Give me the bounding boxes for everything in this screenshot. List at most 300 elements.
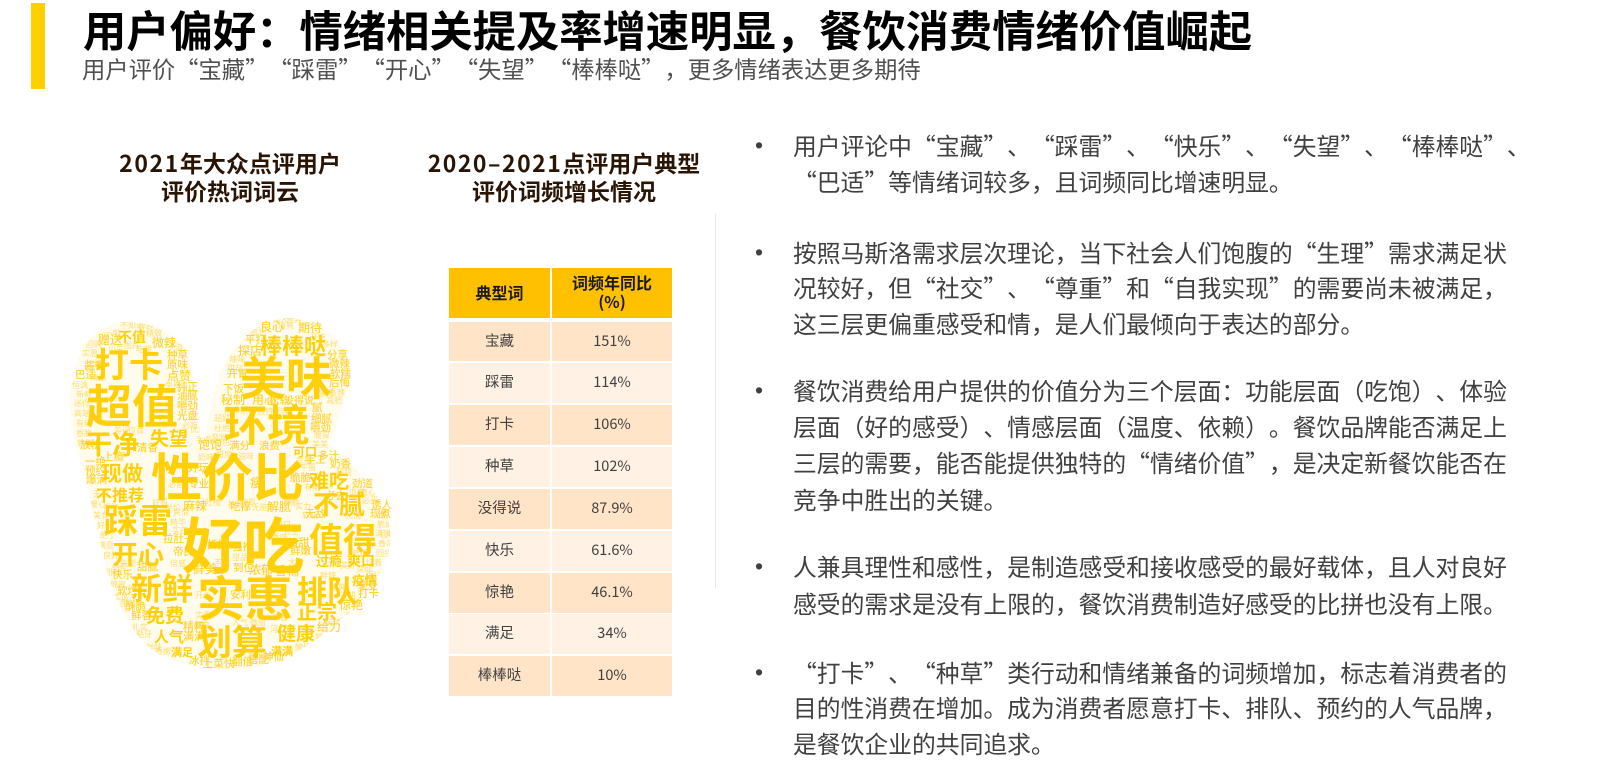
row 1 — [449, 322, 550, 361]
row 3: 打卡 — [485, 413, 514, 434]
word cloud: 原味 — [167, 357, 188, 372]
word cloud: 开心 — [112, 535, 164, 572]
word cloud: 倍感 — [170, 558, 186, 569]
word cloud: 精华 — [170, 517, 186, 528]
word cloud: 油腻 — [177, 388, 198, 403]
word cloud: 失望 — [120, 558, 136, 569]
word cloud: 神仙 — [263, 649, 284, 664]
word cloud: 惊喜 — [128, 425, 144, 436]
word cloud: 鲜味 — [146, 642, 162, 653]
row 1: 宝藏 — [485, 330, 514, 350]
text 2: 这三层更偏重感受和情，是人们最倾向于表达的部分。 — [793, 305, 1364, 340]
word cloud: 下饭 — [223, 381, 244, 396]
word cloud: 过瘾 — [316, 551, 342, 570]
word cloud: 必吃 — [182, 420, 198, 431]
heading: table: 2020–2021点评用户典型 — [428, 145, 700, 179]
word cloud: 开吃 — [310, 332, 326, 343]
word cloud: 不值 — [118, 327, 146, 347]
word cloud: 甜盐 — [227, 363, 243, 374]
accent bar — [31, 3, 45, 89]
bullet 1: • — [755, 132, 763, 158]
word cloud: 浓郁 — [249, 561, 273, 578]
row 5: 没得说 — [478, 497, 521, 518]
word cloud: 先生 — [283, 526, 299, 537]
word cloud: 软绵 — [212, 432, 228, 443]
word cloud: 暴躁 — [315, 632, 331, 643]
word cloud: 减肥 — [326, 395, 342, 406]
word cloud: 独特 — [257, 406, 273, 417]
word cloud: 鲜嫩 — [290, 543, 311, 558]
word cloud: 不腻 — [313, 485, 365, 522]
word cloud: 鲜辣 — [320, 570, 336, 581]
word cloud: 回头 — [376, 548, 392, 559]
row 6: 快乐 — [485, 539, 514, 560]
word cloud: 满满 — [271, 643, 293, 659]
word cloud: 用心 — [252, 391, 276, 408]
word cloud: 浓香 — [240, 406, 256, 417]
word cloud: 解腻 — [267, 498, 291, 515]
word cloud: 清爽 — [330, 582, 346, 593]
word cloud: 免费 — [146, 601, 184, 628]
text 5: “打卡”、“种草”类行动和情绪兼备的词频增加，标志着消费者的 — [793, 654, 1507, 689]
word cloud: 回切 — [380, 529, 396, 540]
row 7: 惊艳 — [485, 581, 514, 602]
word cloud: 折扣 — [207, 537, 228, 552]
word cloud: 软软 — [302, 510, 318, 521]
row 5 — [449, 489, 550, 529]
word cloud: 排队 — [297, 567, 357, 611]
word cloud: 微甜 — [250, 617, 266, 628]
word cloud: 好吃 — [138, 322, 154, 333]
word cloud: 必去 — [325, 488, 346, 503]
word cloud: 有期 — [304, 482, 320, 493]
word cloud: 上菜快 — [203, 656, 235, 671]
word cloud: 吃货 — [136, 344, 152, 355]
word cloud: 酱香 — [84, 358, 105, 373]
heading: word cloud — [119, 145, 341, 207]
word cloud: 预约 — [85, 463, 106, 478]
word cloud: 良好 — [103, 550, 119, 561]
word cloud: 炭烤 — [325, 617, 341, 628]
word cloud: 翻倍 — [232, 654, 253, 669]
word cloud: 甜美 — [120, 598, 136, 609]
text: 10% — [597, 664, 627, 685]
text 2: 按照马斯洛需求层次理论，当下社会人们饱腹的“生理”需求满足状 — [793, 234, 1507, 269]
word cloud: 有缘 — [76, 418, 92, 429]
word cloud: 软烂 — [117, 583, 138, 598]
word cloud: 拍照 — [228, 499, 244, 510]
text 2: 况较好，但“社交”、“尊重”和“自我实现”的需要尚未被满足， — [793, 269, 1507, 304]
word cloud: 必备 — [168, 479, 184, 490]
word cloud: 腻 — [312, 400, 323, 415]
word cloud: 牛蛋 — [300, 462, 316, 473]
word cloud: 回购 — [86, 339, 102, 350]
word cloud: 鲜香 — [131, 608, 152, 623]
word cloud: 好吃 — [182, 497, 304, 586]
heading: table: 评价词频增长情况 — [472, 173, 656, 207]
word cloud: 家常 — [250, 550, 266, 561]
word cloud: 冰拌 — [189, 653, 210, 668]
word cloud: 清甜 — [288, 535, 309, 550]
word cloud: 酥软 — [362, 472, 378, 483]
word cloud: 甜腻 — [137, 559, 158, 574]
word cloud: 赠送 — [98, 331, 122, 348]
subtitle: 用户评价“宝藏”“踩雷”“开心”“失望”“棒棒哒”，更多情绪表达更多期待 — [82, 51, 921, 85]
word cloud: 大赞 — [352, 598, 368, 609]
word cloud: 失望 — [150, 424, 188, 451]
word cloud: 点赞 — [167, 367, 191, 384]
word cloud: 实诚 — [113, 592, 129, 603]
word cloud: 纯正 — [177, 379, 198, 394]
text: 114% — [593, 371, 631, 392]
word cloud: 奶香 — [330, 456, 351, 471]
row 9 — [449, 656, 550, 696]
word cloud: 炭烤 — [345, 610, 361, 621]
table — [449, 268, 672, 318]
word cloud: 光盘 — [177, 408, 198, 423]
word cloud: 滋味 — [238, 451, 254, 462]
word cloud: 劲道 — [352, 476, 373, 491]
text 5: 目的性消费在增加。成为消费者愿意打卡、排队、预约的人气品牌， — [793, 689, 1507, 724]
word cloud: 麻辣 — [183, 497, 207, 514]
text: 61.6% — [591, 539, 633, 560]
word cloud: 甜度 — [216, 449, 232, 460]
text 4 — [793, 548, 1507, 620]
word cloud: 探店 — [238, 342, 262, 359]
word cloud: 给力 — [317, 618, 341, 635]
word cloud: 回味 — [273, 406, 289, 417]
word cloud: 上当 — [84, 358, 100, 369]
text: 151% — [593, 330, 631, 350]
word cloud: 美味 — [240, 343, 332, 409]
text 5 — [793, 654, 1507, 760]
word cloud: 必点 — [345, 453, 361, 464]
word cloud: 香辣 — [329, 387, 345, 398]
table: 词频年同比 — [572, 270, 652, 294]
word cloud: 巴适 — [75, 367, 96, 382]
word cloud: 真心 — [360, 487, 376, 498]
row 2 — [449, 363, 550, 403]
word cloud: 深圳 — [356, 564, 372, 575]
word cloud: 人气 — [154, 626, 184, 647]
word cloud: 丰盛 — [214, 557, 230, 568]
word cloud: 无敌 — [305, 506, 326, 521]
row 3 — [449, 405, 550, 445]
word cloud: 精粹 — [183, 618, 205, 634]
word cloud: 好喝 — [97, 520, 113, 531]
word cloud: 好评 — [355, 462, 371, 473]
word cloud: 酸爽 — [194, 620, 210, 631]
text 3: 竞争中胜出的关键。 — [793, 481, 1007, 516]
word cloud: 干净 — [85, 423, 139, 462]
word cloud: 分享 — [327, 347, 348, 362]
word cloud: 河口 — [270, 624, 286, 635]
word cloud: 拉肚子 — [163, 531, 195, 546]
row 8 — [449, 614, 550, 654]
word cloud: 微辣 — [152, 334, 176, 351]
word cloud: 迷你 — [74, 398, 90, 409]
text 1: “巴适”等情绪词较多，且词频同比增速明显。 — [793, 163, 1293, 198]
word cloud: 必买 — [362, 495, 378, 506]
text 4: 感受的需求是没有上限的，餐饮消费制造好感受的比拼也没有上限。 — [793, 584, 1507, 620]
word cloud: 到位 — [233, 560, 254, 575]
row 7 — [449, 573, 550, 613]
word cloud: 来来 — [245, 320, 261, 331]
text: 102% — [593, 455, 631, 476]
word cloud: 绝了 — [100, 530, 116, 541]
word cloud: 踩雷 — [104, 494, 172, 543]
word cloud: 美好 — [340, 560, 356, 571]
word cloud: 多样 — [322, 339, 338, 350]
word cloud: 嚼劲 — [177, 398, 198, 413]
word cloud: 搭配 — [248, 652, 269, 667]
word cloud: 快乐 — [112, 567, 133, 582]
row 4 — [449, 447, 550, 487]
word cloud: 一般 — [104, 328, 120, 339]
word cloud: 丰富 — [196, 434, 212, 445]
word cloud: 甜品 — [232, 552, 248, 563]
row 9: 棒棒哒 — [478, 664, 521, 685]
word cloud: 现煮 — [370, 506, 391, 521]
word cloud: 性价比 — [151, 437, 304, 511]
word cloud: 喜大 — [272, 314, 288, 325]
word cloud: 半价 — [165, 502, 181, 513]
word cloud: 美食 — [93, 510, 109, 521]
text 5: 是餐饮企业的共同追求。 — [793, 725, 1055, 760]
word cloud: 爆满 — [86, 472, 107, 487]
word cloud: 好看 — [152, 497, 168, 508]
word cloud: 酥脆 — [125, 599, 146, 614]
word cloud: 酸汤 — [318, 388, 334, 399]
row 2: 踩雷 — [485, 371, 514, 392]
word cloud: 满分 — [229, 438, 250, 453]
text 3: 餐饮消费给用户提供的价值分为三个层面：功能层面（吃饱）、体验 — [793, 372, 1507, 407]
word cloud: 高端 — [74, 408, 90, 419]
word cloud: 超赞 — [336, 467, 352, 478]
word cloud: 绝配 — [112, 562, 128, 573]
text: 87.9% — [591, 497, 633, 518]
word cloud: 香味 — [272, 532, 288, 543]
text 3: 三层的需要，能否能提供独特的“情绪价值”，是决定新餐饮能否在 — [793, 444, 1507, 479]
word cloud: 粘牙 — [136, 629, 152, 640]
word cloud: 杜绝 — [214, 423, 230, 434]
word cloud: 平打 — [245, 332, 266, 347]
word cloud: 可口 — [275, 519, 291, 530]
heading: table — [428, 145, 700, 207]
word cloud: 超好 — [214, 413, 230, 424]
word cloud: 微辣 — [329, 356, 350, 371]
word cloud: 小菜 — [108, 343, 124, 354]
word cloud: 香脆 — [76, 428, 92, 439]
word cloud: 浪费 — [259, 438, 280, 453]
word cloud: 打卡 — [95, 338, 163, 387]
word cloud: 瘦 — [250, 474, 262, 491]
word cloud: 新鲜 — [76, 389, 92, 400]
word cloud: 松脆 — [283, 497, 299, 508]
word cloud: 满满 — [183, 628, 205, 644]
word cloud: 一流 — [167, 342, 183, 353]
word cloud: 值得 — [309, 513, 377, 562]
word cloud: 息搜 — [352, 548, 368, 559]
word cloud: 健康 — [277, 619, 315, 646]
word cloud: 鲜虾 — [248, 647, 264, 658]
word cloud: 清香 — [137, 440, 158, 455]
word cloud: 满意 — [98, 540, 114, 551]
word cloud: 精品 — [90, 372, 106, 383]
word cloud: 粉丝 — [105, 567, 121, 578]
word cloud: 划算 — [197, 615, 267, 666]
word cloud: 免费 — [165, 380, 181, 391]
bullet 2: • — [755, 239, 763, 265]
bullet 5: • — [755, 659, 763, 685]
heading: word cloud: 评价热词词云 — [161, 173, 299, 207]
word cloud: 浓香 — [272, 612, 288, 623]
header cells: 典型词 — [475, 280, 524, 304]
word cloud: 美美 — [312, 439, 328, 450]
word cloud: 享受 — [357, 578, 378, 593]
word cloud: 爽滑 — [173, 507, 189, 518]
word cloud: 现做 — [101, 458, 143, 488]
word cloud: 可口 — [293, 443, 317, 460]
row 4: 种草 — [485, 455, 514, 476]
word cloud: 松软 — [269, 393, 290, 408]
word cloud: 超值 — [86, 371, 178, 437]
word cloud: 辣味 — [229, 354, 245, 365]
word cloud: 香糯 — [275, 562, 299, 579]
word cloud: 酸奶 — [295, 642, 311, 653]
header cells — [449, 268, 550, 318]
word cloud: 微微 — [378, 510, 394, 521]
word cloud: 吐槽 — [205, 497, 221, 508]
text 1: 用户评论中“宝藏”、“踩雷”、“快乐”、“失望”、“棒棒哒”、 — [793, 127, 1531, 162]
word cloud: 鲜美 — [193, 560, 217, 577]
word cloud: 嚼劲 — [310, 420, 331, 435]
word cloud: 后悔 — [329, 375, 350, 390]
bullet 4: • — [755, 553, 763, 579]
word cloud: 环境 — [224, 392, 310, 454]
word cloud: 放松 — [80, 437, 101, 452]
heading: word cloud: 2021年大众点评用户 — [119, 145, 341, 179]
row 8: 满足 — [485, 622, 514, 643]
word cloud: 手工 — [305, 452, 326, 467]
word cloud: 好玩 — [188, 460, 209, 475]
vertical divider — [714, 214, 716, 588]
word cloud: 不知道 — [120, 320, 144, 331]
row 6 — [449, 531, 550, 571]
text 4: 人兼具理性和感性，是制造感受和接收感受的最好载体，且人对良好 — [793, 548, 1507, 583]
word cloud: 清爽 — [278, 320, 294, 331]
word cloud: 清淡 — [375, 528, 391, 539]
word cloud: 招牌 — [224, 406, 240, 417]
text 3: 层面（好的感受）、情感层面（温度、依赖）。餐饮品牌能否满足上 — [793, 408, 1507, 443]
word cloud: 无敌 — [93, 489, 109, 500]
word cloud: 帝民 — [173, 544, 194, 559]
table: (%) — [598, 288, 626, 312]
word cloud: 优惠 — [190, 424, 206, 435]
word cloud: 上瘾 — [103, 449, 124, 464]
word cloud: 可爱 — [158, 413, 174, 424]
word cloud: 饱饱 — [198, 436, 222, 453]
word cloud: 绵密 — [110, 579, 126, 590]
text 3 — [793, 372, 1507, 516]
word cloud: 期待 — [298, 319, 322, 336]
word cloud: 正宗 — [297, 596, 337, 625]
word cloud: 绿着 — [366, 557, 382, 568]
word cloud: 香嫩 — [155, 646, 171, 657]
word cloud: 新鲜 — [131, 564, 193, 609]
word cloud: 精致 — [146, 328, 162, 339]
word cloud: 安利 — [230, 587, 251, 602]
word cloud: 开心 — [195, 590, 211, 601]
word cloud: 实惠 — [82, 348, 98, 359]
word cloud: 满足 — [171, 644, 193, 660]
text 1 — [793, 127, 1531, 198]
word cloud: 奶味 — [198, 452, 214, 463]
word cloud: 软糯 — [330, 366, 351, 381]
word cloud: 无愧 — [345, 510, 361, 521]
word cloud: 专业 — [188, 476, 209, 491]
word cloud — [70, 214, 716, 670]
word cloud: 开胃 — [227, 366, 248, 381]
word cloud: 种草 — [167, 347, 188, 362]
word cloud: 人气 — [232, 617, 248, 628]
word cloud: 恒满 — [72, 380, 88, 391]
word cloud: 保证 — [366, 570, 382, 581]
word cloud: 醇厚 — [240, 497, 256, 508]
word cloud: 南北 — [250, 327, 266, 338]
word cloud: 软嫩 — [77, 438, 93, 449]
text: 106% — [593, 413, 631, 434]
word cloud: 实力 — [295, 501, 311, 512]
word cloud: 打卡 — [358, 586, 379, 601]
bullet 3: • — [755, 377, 763, 403]
text: 46.1% — [591, 581, 633, 602]
word cloud: 脆脆 — [290, 470, 311, 485]
word cloud: 扎实 — [132, 622, 148, 633]
word cloud: 香脆 — [103, 502, 119, 513]
word cloud: 诱人 — [371, 497, 392, 512]
word cloud: 吃撑 — [230, 499, 251, 514]
word cloud: 不推荐 — [96, 482, 144, 506]
word cloud: 暖心 — [90, 499, 106, 510]
word cloud: 特色 — [214, 437, 230, 448]
word cloud: 图片 — [124, 340, 140, 351]
word cloud: 秘制 — [221, 391, 245, 408]
word cloud: 惊艳 — [339, 596, 363, 613]
word cloud: 不错 — [340, 590, 356, 601]
word cloud: 普奔 — [286, 314, 302, 325]
text: 34% — [597, 622, 627, 643]
word cloud: 多汁 — [318, 448, 339, 463]
word cloud: 细腻 — [311, 411, 332, 426]
word cloud: 幸福 — [296, 455, 312, 466]
word cloud: 爽口 — [347, 551, 375, 571]
word cloud: 差评 — [114, 425, 130, 436]
word cloud: 疫情 — [352, 570, 378, 589]
word cloud: 道歉 — [349, 487, 365, 498]
word cloud: 暖胃 — [314, 430, 330, 441]
word cloud: 强推 — [232, 539, 253, 554]
text 2 — [793, 234, 1507, 340]
word cloud: 实在 — [172, 525, 188, 536]
word cloud: 一绝 — [85, 454, 106, 469]
word cloud: 大份 — [288, 557, 304, 568]
word cloud: 实惠 — [195, 610, 211, 621]
word cloud: 没得说 — [284, 392, 314, 407]
word cloud: 香浓 — [378, 538, 394, 549]
word cloud: 无脑 — [252, 502, 268, 513]
word cloud: 良心 — [260, 318, 284, 335]
